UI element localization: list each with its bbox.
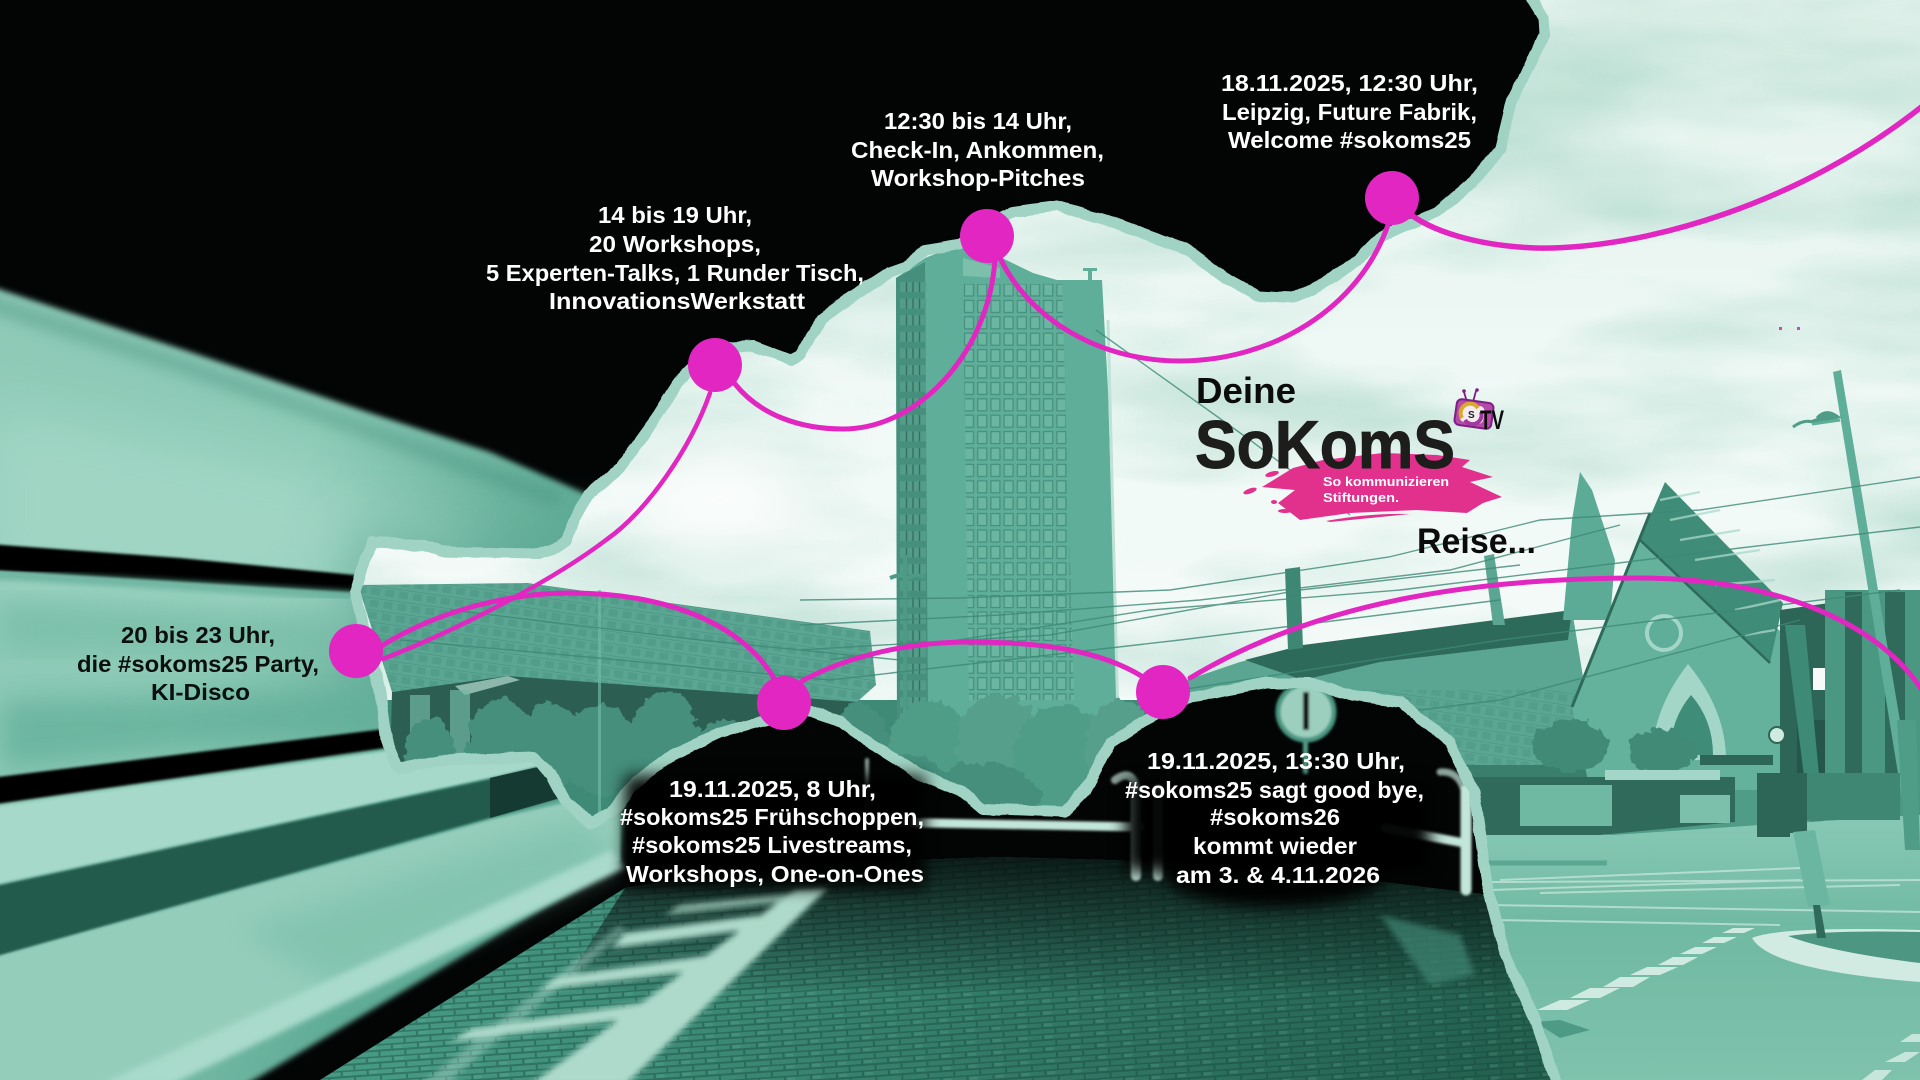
pale window band: [0, 745, 560, 885]
curve: from right edge to first stop: [1405, 104, 1920, 248]
brush stroke: [1243, 453, 1502, 522]
Deine: Deine: [1196, 370, 1296, 411]
overhead wires: [400, 330, 1920, 730]
tagline: Stiftungen.: [1323, 491, 1399, 505]
text: check-in: [851, 108, 1104, 191]
route curves: [383, 104, 1920, 695]
tower: [896, 240, 1118, 720]
lower train panel: [0, 790, 620, 1080]
text: farewell: #sokoms26: [1210, 804, 1340, 830]
text: check-in: 12:30 bis 14 Uhr,: [884, 108, 1072, 134]
text: party: [77, 622, 319, 705]
glow behind morning text: [625, 776, 925, 888]
text: workshops: InnovationsWerkstatt: [549, 288, 805, 314]
route stops: [329, 171, 1419, 730]
traffic pole with box: [1769, 720, 1920, 938]
church trees: [1532, 719, 1696, 774]
trees: [403, 691, 1145, 807]
text: party: 20 bis 23 Uhr,: [121, 622, 275, 648]
text: workshops: 14 bis 19 Uhr,: [598, 202, 752, 228]
text: arrival: 18.11.2025, 12:30 Uhr,: [1221, 70, 1478, 96]
text: party: KI-Disco: [151, 679, 250, 705]
tagline: [1323, 475, 1449, 505]
text: farewell: kommt wieder: [1193, 833, 1357, 859]
train lower highlight: [100, 850, 625, 1080]
sky with clouds: [362, 0, 1920, 700]
train streak 1: [0, 544, 358, 593]
logo: Deine SoKomS Reise: [1195, 370, 1536, 561]
text: workshops: [486, 202, 864, 314]
curve: farewell to right edge: [1190, 578, 1920, 695]
specks in the sky: [1779, 327, 1800, 330]
curve: first stop to check-in: [1000, 222, 1389, 361]
text: farewell: #sokoms25 sagt good bye,: [1125, 777, 1424, 803]
traffic island: [1752, 929, 1920, 982]
text: workshops: 5 Experten-Talks, 1 Runder Tisch,: [486, 260, 864, 286]
base mass under the skyline: [380, 700, 1920, 840]
ground and street: [1440, 815, 1920, 1080]
right building and lamp: [1780, 370, 1920, 860]
tv lettering: TV: [1480, 405, 1504, 435]
text: farewell: 19.11.2025, 13:30 Uhr,: [1147, 748, 1405, 774]
text: party: die #sokoms25 Party,: [77, 651, 319, 677]
lamp on tower: [889, 555, 926, 710]
text: morning: #sokoms25 Frühschoppen,: [620, 804, 924, 830]
church tower poles: [1285, 472, 1615, 650]
curve: workshops to party: [383, 393, 710, 659]
road sign: [1278, 684, 1334, 774]
text: arrival: [1221, 70, 1478, 153]
tagline: So kommunizieren: [1323, 475, 1449, 489]
left glass building: [358, 583, 876, 770]
text: morning: [620, 776, 924, 887]
train body: [0, 283, 640, 1080]
icon: retro tv: [1454, 388, 1494, 429]
text: check-in: Workshop-Pitches: [871, 165, 1085, 191]
text: farewell: am 3. & 4.11.2026: [1176, 862, 1380, 888]
text: morning: Workshops, One-on-Ones: [626, 861, 924, 887]
icon: retro tv: S: [1468, 410, 1475, 421]
train dark band: [0, 762, 560, 958]
text: arrival: Welcome #sokoms25: [1228, 127, 1471, 153]
text: workshops: 20 Workshops,: [589, 231, 761, 257]
text: check-in: Check-In, Ankommen,: [851, 137, 1104, 163]
text: morning: #sokoms25 Livestreams,: [632, 832, 912, 858]
curve: check-in to workshops: [735, 258, 995, 429]
curve: party to morning: [383, 593, 775, 680]
tram stop and shelters: [1473, 755, 1900, 837]
Reise: Reise...: [1417, 522, 1536, 561]
Augusteum building: [1187, 611, 1587, 778]
wordmark: SoKomS: [1195, 407, 1455, 483]
curve: morning to farewell: [802, 642, 1143, 681]
text: farewell: [1125, 748, 1424, 888]
train streak 2: [0, 729, 392, 805]
cut-out outline band: [355, 0, 1557, 1080]
road marking: [420, 888, 828, 1080]
glow behind farewell text: [1125, 780, 1430, 907]
church: [1570, 482, 1783, 790]
fence: [867, 760, 1466, 890]
pavement: [312, 857, 1560, 1080]
text: arrival: Leipzig, Future Fabrik,: [1222, 99, 1477, 125]
text: morning: 19.11.2025, 8 Uhr,: [669, 776, 876, 802]
